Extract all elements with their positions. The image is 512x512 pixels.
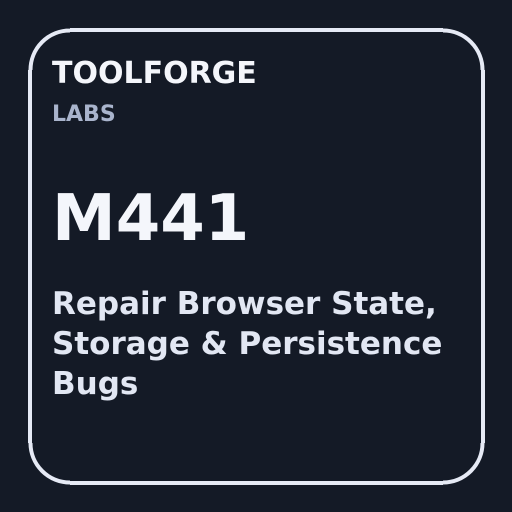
course title: Bugs	[52, 366, 138, 402]
course code: M441	[52, 182, 249, 256]
brand subtitle: LABS	[52, 102, 116, 127]
brand name: TOOLFORGE	[52, 56, 257, 91]
rounded border panel	[30, 30, 483, 483]
course title	[52, 286, 442, 402]
course title: Repair Browser State,	[52, 286, 437, 322]
course title: Storage & Persistence	[52, 326, 442, 362]
